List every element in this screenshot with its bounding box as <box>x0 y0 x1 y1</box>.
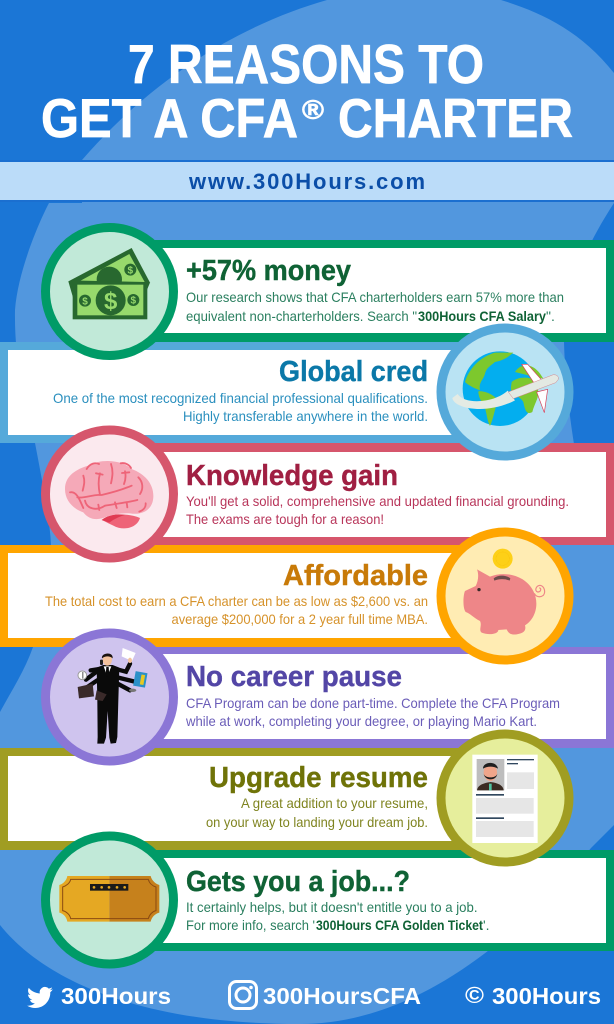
title: GET A CFA <box>41 87 298 149</box>
panel: global cred <box>0 342 505 443</box>
title <box>41 33 573 149</box>
icon: brain badge <box>46 430 174 558</box>
icon: globe badge <box>441 328 569 456</box>
icon: golden ticket badge <box>46 836 174 964</box>
icon: piggy bank badge <box>441 532 569 660</box>
panel: affordable: Affordable <box>283 560 428 592</box>
panel: upgrade resume: on your way to landing your dream job. <box>206 814 428 830</box>
panel: +57% money: Our research shows that CFA charterholders earn 57% more than <box>186 289 564 305</box>
icon: money badge <box>46 228 174 356</box>
panel: global cred: One of the most recognized financial professional qualifications. <box>53 390 428 406</box>
panel: gets you a job: For more info, search ' <box>186 917 315 933</box>
panel: +57% money: 300Hours CFA Salary <box>418 308 546 324</box>
panel: upgrade resume: A great addition to your resume, <box>241 795 428 811</box>
panel: knowledge gain: The exams are tough for a reason! <box>186 511 384 527</box>
panel: no career pause: No career pause <box>186 661 402 693</box>
icon: money badge: $ <box>82 296 88 307</box>
footer: copyright: © <box>465 982 484 1008</box>
panel: no career pause <box>110 647 614 748</box>
icon: money badge: $ <box>104 288 117 315</box>
panel: +57% money: equivalent non-charterholders. Search " <box>186 308 417 324</box>
panel: knowledge gain <box>110 443 614 545</box>
panel: knowledge gain: Knowledge gain <box>186 460 398 492</box>
panel: affordable <box>0 545 505 647</box>
footer: copyright: 300Hours <box>492 983 601 1009</box>
panel: +57% money: +57% money <box>186 255 351 287</box>
panel: +57% money <box>110 240 614 342</box>
panel: upgrade resume <box>0 748 505 850</box>
panel: no career pause: CFA Program can be done part-time. Complete the CFA Program <box>186 695 560 711</box>
panel: +57% money: ". <box>546 308 555 324</box>
panel: upgrade resume: Upgrade resume <box>209 762 428 794</box>
panel: no career pause: while at work, completing your degree, or playing Mario Kart. <box>185 713 537 729</box>
title: 7 REASONS TO <box>128 33 484 95</box>
panel: global cred: Highly transferable anywhere in the world. <box>183 408 428 424</box>
panel: gets you a job: Gets you a job...? <box>186 866 410 898</box>
icon: resume badge <box>441 734 569 862</box>
icon: money badge: $ <box>128 265 134 276</box>
panel: knowledge gain: You'll get a solid, comprehensive and updated financial grounding. <box>186 493 569 509</box>
title: ® <box>302 95 324 125</box>
panel: gets you a job: It certainly helps, but it doesn't entitle you to a job. <box>186 899 478 915</box>
panel: affordable: The total cost to earn a CFA charter can be as low as $2,600 vs. an <box>45 593 428 609</box>
title: CHARTER <box>338 87 573 149</box>
panel: gets you a job: 300Hours CFA Golden Ticket <box>316 917 483 933</box>
icon: money badge: $ <box>131 296 137 307</box>
website banner <box>0 160 614 202</box>
footer: instagram: 300HoursCFA <box>263 983 421 1009</box>
website banner: www.300Hours.com <box>188 169 425 194</box>
panel: gets you a job: '. <box>483 917 490 933</box>
panel: affordable: average $200,000 for a 2 year full time MBA. <box>172 611 428 627</box>
icon: busy businessman badge <box>46 633 174 761</box>
footer: twitter: 300Hours <box>61 983 171 1009</box>
panel: gets you a job <box>110 850 614 951</box>
panel: global cred: Global cred <box>279 356 428 388</box>
